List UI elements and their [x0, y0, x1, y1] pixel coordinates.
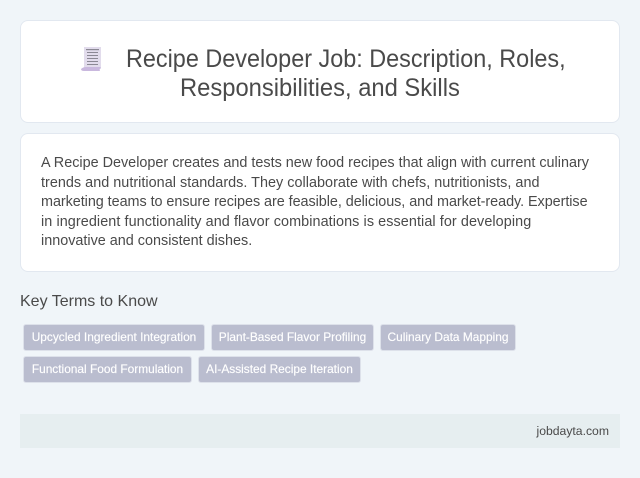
description panel: [20, 133, 620, 272]
footer bar: [20, 414, 620, 448]
tag: [380, 324, 516, 351]
tag: Upcycled Ingredient Integration: [32, 330, 196, 344]
description text: marketing teams to ensure recipes are feasible, delicious, and market-ready. Expertise: [41, 194, 588, 210]
tag: AI-Assisted Recipe Iteration: [206, 362, 353, 376]
tag: [23, 356, 192, 383]
icon: recipe scroll: [81, 47, 101, 71]
tag: Culinary Data Mapping: [388, 330, 508, 344]
tag: Plant-Based Flavor Profiling: [219, 330, 366, 344]
description text: innovative and consistent dishes.: [41, 233, 252, 249]
title: Responsibilities, and Skills: [180, 74, 460, 102]
title: Recipe Developer Job: Description, Roles,: [126, 45, 566, 73]
description text: trends and nutritional standards. They collaborate with chefs, nutritionists, and: [41, 175, 540, 191]
description text: [41, 155, 589, 249]
header panel: [20, 20, 620, 123]
tag: Functional Food Formulation: [32, 362, 183, 376]
description text: A Recipe Developer creates and tests new food recipes that align with current culinary: [41, 155, 589, 171]
tag: [23, 324, 205, 351]
tag: [198, 356, 361, 383]
heading: key terms: Key Terms to Know: [20, 293, 158, 310]
footer source: jobdayta.com: [536, 424, 609, 438]
title: [126, 45, 566, 102]
tag: [211, 324, 374, 351]
tag list: [23, 324, 516, 383]
description text: in ingredient functionality and flavor combinations is essential for developing: [41, 214, 531, 230]
